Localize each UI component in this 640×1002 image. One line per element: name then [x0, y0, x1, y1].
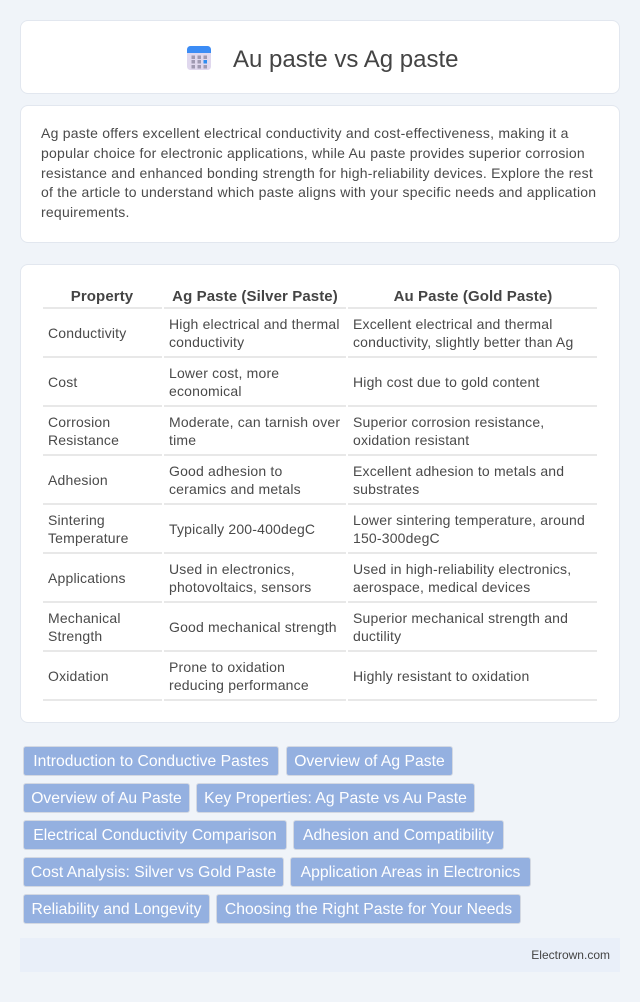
row: adhesion: Excellent adhesion to metals and: [353, 463, 564, 479]
tag: [23, 894, 210, 924]
tag: Key Properties: Ag Paste vs Au Paste: [204, 790, 467, 807]
tag: Application Areas in Electronics: [301, 864, 520, 881]
icon: calendar: [187, 46, 211, 70]
tag: Overview of Au Paste: [31, 790, 182, 807]
intro text: popular choice for electronic applications, while Au paste provides superior corrosion: [41, 145, 585, 161]
row: mechanical strength: Strength: [48, 628, 102, 644]
row: adhesion: Good adhesion to: [169, 463, 282, 479]
tag: [216, 894, 521, 924]
row: conductivity: conductivity, slightly better than Ag: [353, 334, 573, 350]
row: mechanical strength: ductility: [353, 628, 401, 644]
row: conductivity: conductivity: [169, 334, 244, 350]
tag: Choosing the Right Paste for Your Needs: [225, 901, 512, 918]
row: oxidation: [48, 659, 529, 693]
row: adhesion: Adhesion: [48, 472, 108, 488]
row: corrosion resistance: [48, 414, 544, 448]
intro text: resistance and enhanced bonding strength for high-reliability devices. Explore the rest: [41, 165, 593, 181]
row: sintering temperature: Temperature: [48, 530, 129, 546]
row: oxidation: Prone to oxidation: [169, 659, 285, 675]
row: mechanical strength: Good mechanical strength: [169, 619, 337, 635]
row: corrosion resistance: Resistance: [48, 432, 119, 448]
tag: [23, 857, 284, 887]
tag: Overview of Ag Paste: [294, 753, 445, 770]
tag: [196, 783, 475, 813]
footer: [20, 938, 620, 972]
row: applications: Used in high-reliability electronics,: [353, 561, 571, 577]
row: applications: Applications: [48, 570, 126, 586]
tag: [286, 746, 453, 776]
row: adhesion: substrates: [353, 481, 419, 497]
tag: Introduction to Conductive Pastes: [33, 753, 269, 770]
tag: Electrical Conductivity Comparison: [33, 827, 277, 844]
tag: [290, 857, 531, 887]
row: adhesion: ceramics and metals: [169, 481, 301, 497]
title: Au paste vs Ag paste: [233, 46, 458, 73]
row: oxidation: reducing performance: [169, 677, 309, 693]
tag: [23, 746, 279, 776]
footer text: Electrown.com: [531, 948, 610, 962]
intro text: of the article to understand which paste aligns with your specific needs and application: [41, 184, 596, 200]
table header: Property: [71, 288, 133, 305]
header card: [20, 20, 620, 94]
tag: Reliability and Longevity: [32, 901, 201, 918]
row: sintering temperature: 150-300degC: [353, 530, 440, 546]
row: applications: photovoltaics, sensors: [169, 579, 311, 595]
row: oxidation: Highly resistant to oxidation: [353, 668, 529, 684]
row: corrosion resistance: Superior corrosion resistance,: [353, 414, 544, 430]
row: conductivity: Conductivity: [48, 325, 126, 341]
row: conductivity: High electrical and thermal: [169, 316, 340, 332]
tag: [23, 820, 287, 850]
tag: Cost Analysis: Silver vs Gold Paste: [31, 864, 276, 881]
row: corrosion resistance: time: [169, 432, 196, 448]
row: cost: Cost: [48, 374, 78, 390]
row: conductivity: [48, 316, 573, 350]
row: cost: [48, 365, 540, 399]
row: conductivity: Excellent electrical and thermal: [353, 316, 553, 332]
intro text: requirements.: [41, 204, 130, 220]
row: corrosion resistance: oxidation resistant: [353, 432, 469, 448]
tag: Adhesion and Compatibility: [303, 827, 494, 844]
topic tags: [23, 746, 531, 924]
intro text: Ag paste offers excellent electrical conductivity and cost-effectiveness, making it a: [41, 125, 569, 141]
row: cost: Lower cost, more: [169, 365, 279, 381]
row: corrosion resistance: Moderate, can tarnish over: [169, 414, 340, 430]
table header: [71, 288, 552, 305]
table header: Ag Paste (Silver Paste): [172, 288, 338, 305]
row: sintering temperature: Lower sintering temperature, around: [353, 512, 585, 528]
row: applications: Used in electronics,: [169, 561, 295, 577]
row: mechanical strength: [48, 610, 568, 644]
tag: [293, 820, 504, 850]
row: mechanical strength: Mechanical: [48, 610, 121, 626]
row: mechanical strength: Superior mechanical strength and: [353, 610, 568, 626]
row: corrosion resistance: Corrosion: [48, 414, 110, 430]
row: applications: [48, 561, 571, 595]
row: sintering temperature: Typically 200-400degC: [169, 521, 315, 537]
row: cost: economical: [169, 383, 242, 399]
row: oxidation: Oxidation: [48, 668, 109, 684]
table header: Au Paste (Gold Paste): [394, 288, 552, 305]
row: applications: aerospace, medical devices: [353, 579, 530, 595]
tag: [23, 783, 190, 813]
comparison table panel: [20, 264, 620, 723]
comparison table: [43, 288, 597, 701]
intro text: [41, 125, 596, 220]
row: cost: High cost due to gold content: [353, 374, 540, 390]
row: sintering temperature: [48, 512, 585, 546]
intro panel: [20, 105, 620, 243]
row: adhesion: [48, 463, 564, 497]
row: sintering temperature: Sintering: [48, 512, 105, 528]
